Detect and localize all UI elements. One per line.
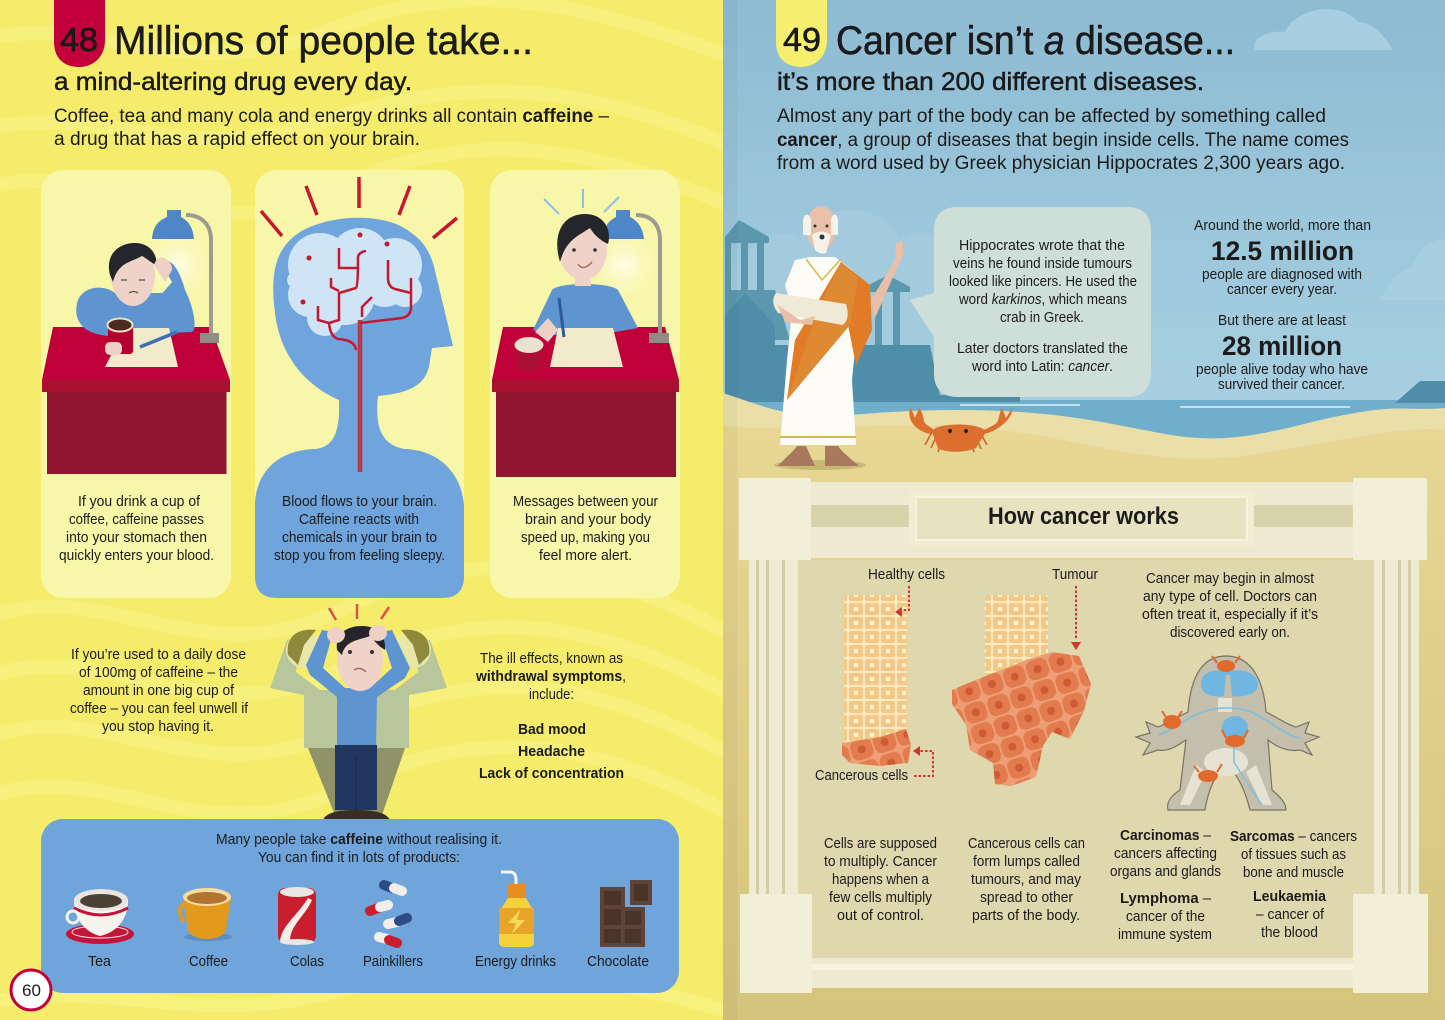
blue rays bbox=[544, 189, 619, 214]
ghost figure bbox=[270, 630, 447, 815]
text: withdrawal symptoms list: withdrawal symptoms, bbox=[475, 669, 626, 685]
text: withdrawal symptoms list: The ill effects, known as bbox=[480, 651, 623, 667]
panel: products with caffeine bbox=[41, 819, 679, 993]
icon: tea bbox=[66, 889, 134, 944]
text: tumours: tumours, and may bbox=[971, 872, 1082, 888]
label: cancerous cells: Cancerous cells bbox=[815, 768, 908, 784]
caption: stop you from feeling sleepy. bbox=[274, 548, 445, 564]
statistics: 12.5 million bbox=[1211, 236, 1354, 266]
diagram: healthy and cancerous cells bbox=[815, 567, 945, 784]
panel: drink coffee bbox=[41, 170, 231, 598]
text: carcinomas and lymphoma: Carcinomas – bbox=[1120, 828, 1212, 844]
head silhouette bbox=[255, 218, 464, 598]
alert rays bbox=[261, 177, 457, 238]
icon: lamp bbox=[580, 210, 669, 343]
healthy cell column bbox=[985, 595, 1048, 680]
caption: If you drink a cup of bbox=[78, 494, 201, 510]
red blood vessels bbox=[318, 248, 411, 472]
statistics: people alive today who have bbox=[1196, 362, 1368, 378]
panel text: Many people take caffeine without realising it. bbox=[216, 832, 502, 848]
text: sarcomas and leukaemia: bone and muscle bbox=[1243, 865, 1344, 881]
heading plaque: How cancer works bbox=[988, 503, 1179, 530]
text: tumours bbox=[968, 836, 1085, 924]
panel text: You can find it in lots of products: bbox=[258, 850, 460, 866]
healthy cell column bbox=[844, 595, 907, 743]
text: sarcomas and leukaemia bbox=[1230, 829, 1357, 941]
caption: into your stomach then bbox=[66, 530, 207, 546]
illustration: Hippocrates bbox=[773, 206, 904, 470]
icon: lamp bbox=[134, 210, 222, 343]
text: cells multiply: to multiply. Cancer bbox=[824, 854, 937, 870]
coffee cup bbox=[514, 337, 544, 370]
text: sarcomas and leukaemia: Sarcomas – cancers bbox=[1230, 829, 1357, 845]
heading plaque bbox=[909, 491, 1254, 546]
number badge 49: 49 bbox=[783, 21, 821, 58]
heading: fact 49 bbox=[776, 0, 1349, 174]
brain activity dots bbox=[300, 232, 390, 304]
text: tumours: spread to other bbox=[980, 890, 1073, 906]
text: sarcomas and leukaemia: – cancer of bbox=[1256, 907, 1325, 923]
text: cells multiply bbox=[824, 836, 937, 924]
illustration: ancient temples bbox=[725, 210, 1020, 402]
speech bubble: Hippocrates: Hippocrates wrote that the bbox=[959, 238, 1125, 254]
intro text: from a word used by Greek physician Hippocrates 2,300 years ago. bbox=[777, 153, 1345, 174]
caption: chemicals in your brain to bbox=[282, 530, 437, 546]
statistics: survived their cancer. bbox=[1218, 377, 1345, 393]
text: caffeine withdrawal: coffee – you can feel unwell if bbox=[70, 701, 249, 717]
intro text: a drug that has a rapid effect on your brain. bbox=[54, 129, 420, 150]
icon: cola can bbox=[278, 887, 316, 945]
sandals bbox=[778, 446, 815, 466]
beams bbox=[811, 482, 1353, 988]
toga bbox=[780, 257, 860, 445]
text: caffeine withdrawal: amount in one big cup of bbox=[83, 683, 235, 699]
intro text: Coffee, tea and many cola and energy drinks all contain caffeine – bbox=[54, 106, 609, 127]
corner blocks bbox=[739, 478, 1428, 993]
text: carcinomas and lymphoma: organs and glands bbox=[1110, 864, 1221, 880]
text: tea: Tea bbox=[88, 954, 112, 970]
text: caffeine withdrawal: of 100mg of caffeine – the bbox=[79, 665, 238, 681]
inner panel bbox=[798, 560, 1374, 958]
text: tumours: parts of the body. bbox=[972, 908, 1080, 924]
speech bubble: Hippocrates: crab in Greek. bbox=[1000, 310, 1084, 326]
orange sash bbox=[787, 262, 872, 400]
brain bbox=[287, 228, 422, 336]
text: carcinomas and lymphoma: Lymphoma – bbox=[1120, 891, 1212, 907]
text: caffeine withdrawal: you stop having it. bbox=[102, 719, 214, 735]
subtitle: it’s more than 200 different diseases. bbox=[777, 68, 1204, 96]
caption: speed up, making you bbox=[521, 530, 650, 546]
icon: painkillers bbox=[370, 885, 407, 943]
panel: blood flows to brain bbox=[255, 170, 464, 598]
number badge 48 bbox=[54, 0, 105, 67]
intro text: Almost any part of the body can be affected by something called bbox=[777, 106, 1326, 127]
panel text bbox=[216, 832, 502, 866]
text: sarcomas and leukaemia: of tissues such as bbox=[1241, 847, 1346, 863]
text: cells multiply: out of control. bbox=[837, 908, 924, 924]
text: tumours: form lumps called bbox=[973, 854, 1080, 870]
pain rays bbox=[329, 604, 389, 620]
illustration: crab bbox=[909, 408, 1012, 452]
subtitle: a mind-altering drug every day. bbox=[54, 68, 412, 96]
diagram: tumour bbox=[952, 567, 1098, 786]
text: withdrawal symptoms list: Headache bbox=[518, 744, 585, 760]
text: colas: Colas bbox=[290, 954, 324, 970]
head bbox=[806, 206, 836, 250]
text: sarcomas and leukaemia: the blood bbox=[1261, 925, 1318, 941]
text: carcinomas and lymphoma: cancer of the bbox=[1126, 909, 1205, 925]
page number 60: 60 bbox=[22, 981, 41, 1000]
man body bbox=[306, 625, 410, 820]
number badge 48: 48 bbox=[60, 21, 98, 58]
blue brain bbox=[1201, 670, 1258, 697]
text: cancer may begin: Cancer may begin in almost bbox=[1146, 571, 1314, 587]
paper bbox=[105, 328, 178, 367]
desk bbox=[492, 327, 679, 477]
right page sky and sea bbox=[723, 0, 1445, 440]
blue organ and lymph lines bbox=[1158, 708, 1300, 805]
speech bubble: Hippocrates bbox=[910, 207, 1151, 397]
text: sarcomas and leukaemia: Leukaemia bbox=[1253, 889, 1327, 905]
number badge 49 bbox=[776, 0, 827, 67]
label: healthy cells bbox=[868, 567, 945, 617]
text: cancer may begin: discovered early on. bbox=[1170, 625, 1290, 641]
text: painkillers: Painkillers bbox=[363, 954, 423, 970]
text: withdrawal symptoms list: include: bbox=[529, 687, 574, 703]
coffee cup bbox=[105, 318, 133, 355]
text: cancer may begin: any type of cell. Doctors can bbox=[1143, 589, 1317, 605]
intro text: cancer, a group of diseases that begin inside cells. The name comes bbox=[777, 130, 1349, 151]
text: energy drinks: Energy drinks bbox=[475, 954, 556, 970]
text: tumours: Cancerous cells can bbox=[968, 836, 1085, 852]
text: cells multiply: few cells multiply bbox=[829, 890, 933, 906]
text: withdrawal symptoms list bbox=[475, 651, 626, 782]
caption: quickly enters your blood. bbox=[59, 548, 214, 564]
speech bubble: Hippocrates: Later doctors translated the bbox=[957, 341, 1128, 357]
text: carcinomas and lymphoma: immune system bbox=[1118, 927, 1212, 943]
caption bbox=[274, 494, 445, 564]
tumour cluster bbox=[952, 652, 1091, 786]
statistics: But there are at least bbox=[1218, 313, 1346, 329]
text: carcinomas and lymphoma bbox=[1110, 828, 1221, 943]
statistics: Around the world, more than bbox=[1194, 218, 1371, 234]
page number 60 bbox=[11, 970, 51, 1010]
text: cancer may begin bbox=[1142, 571, 1318, 641]
label: cancerous cells bbox=[815, 746, 933, 784]
caption: brain and your body bbox=[525, 512, 652, 528]
crabs on body bbox=[1162, 656, 1248, 782]
label: healthy cells: Healthy cells bbox=[868, 567, 945, 583]
statistics: cancer every year. bbox=[1227, 282, 1337, 298]
panel: feeling alert bbox=[490, 170, 680, 598]
desk bbox=[42, 327, 230, 474]
diagram: human body with cancers bbox=[1136, 656, 1319, 810]
intro text bbox=[777, 106, 1349, 174]
text: caffeine withdrawal: If you’re used to a daily dose bbox=[71, 647, 246, 663]
text: withdrawal symptoms list: Bad mood bbox=[518, 722, 586, 738]
statistics: 28 million bbox=[1222, 331, 1342, 361]
cancerous cell cluster bbox=[842, 729, 911, 766]
text: cells multiply: Cells are supposed bbox=[824, 836, 937, 852]
caption: Blood flows to your brain. bbox=[282, 494, 437, 510]
icon: energy drink bbox=[499, 872, 534, 947]
icon: chocolate bbox=[600, 880, 652, 947]
caption bbox=[59, 494, 214, 564]
speech bubble: Hippocrates: veins he found inside tumours bbox=[953, 256, 1132, 272]
panel: how cancer works frame bbox=[739, 478, 1428, 993]
label: tumour bbox=[1052, 567, 1098, 650]
title: Millions of people take... bbox=[114, 19, 533, 63]
text: withdrawal symptoms list: Lack of concentration bbox=[479, 766, 624, 782]
paper bbox=[550, 328, 623, 367]
caption: coffee, caffeine passes bbox=[69, 512, 204, 528]
left page background bbox=[0, 0, 740, 1020]
intro text bbox=[54, 106, 609, 150]
illustration: man with headache bbox=[270, 604, 447, 820]
caption: Messages between your bbox=[513, 494, 658, 510]
heading: fact 48 bbox=[54, 0, 609, 150]
beach sand bbox=[723, 0, 1445, 1020]
tired man bbox=[76, 243, 195, 367]
speech bubble: Hippocrates: looked like pincers. He used the bbox=[949, 274, 1137, 290]
text: cancer may begin: often treat it, especially if it’s bbox=[1142, 607, 1318, 623]
speech bubble: Hippocrates: word karkinos, which means bbox=[958, 292, 1127, 308]
columns bbox=[749, 558, 1419, 898]
text: carcinomas and lymphoma: cancers affecting bbox=[1114, 846, 1217, 862]
alert man bbox=[514, 214, 638, 370]
statistics: people are diagnosed with bbox=[1202, 267, 1362, 283]
text: coffee: Coffee bbox=[189, 954, 228, 970]
text: caffeine withdrawal bbox=[70, 647, 249, 735]
caption: Caffeine reacts with bbox=[299, 512, 419, 528]
speech bubble: Hippocrates: word into Latin: cancer. bbox=[971, 359, 1113, 375]
text: cells multiply: happens when a bbox=[832, 872, 930, 888]
statistics bbox=[1194, 218, 1371, 393]
icon: coffee bbox=[180, 888, 232, 941]
label: tumour: Tumour bbox=[1052, 567, 1098, 583]
title: Cancer isn’t a disease... bbox=[836, 19, 1235, 63]
scroll bbox=[773, 293, 848, 325]
raised arm bbox=[871, 240, 904, 318]
text: chocolate: Chocolate bbox=[587, 954, 649, 970]
caption bbox=[513, 494, 658, 564]
bones bbox=[1180, 698, 1272, 805]
caption: feel more alert. bbox=[539, 548, 632, 564]
